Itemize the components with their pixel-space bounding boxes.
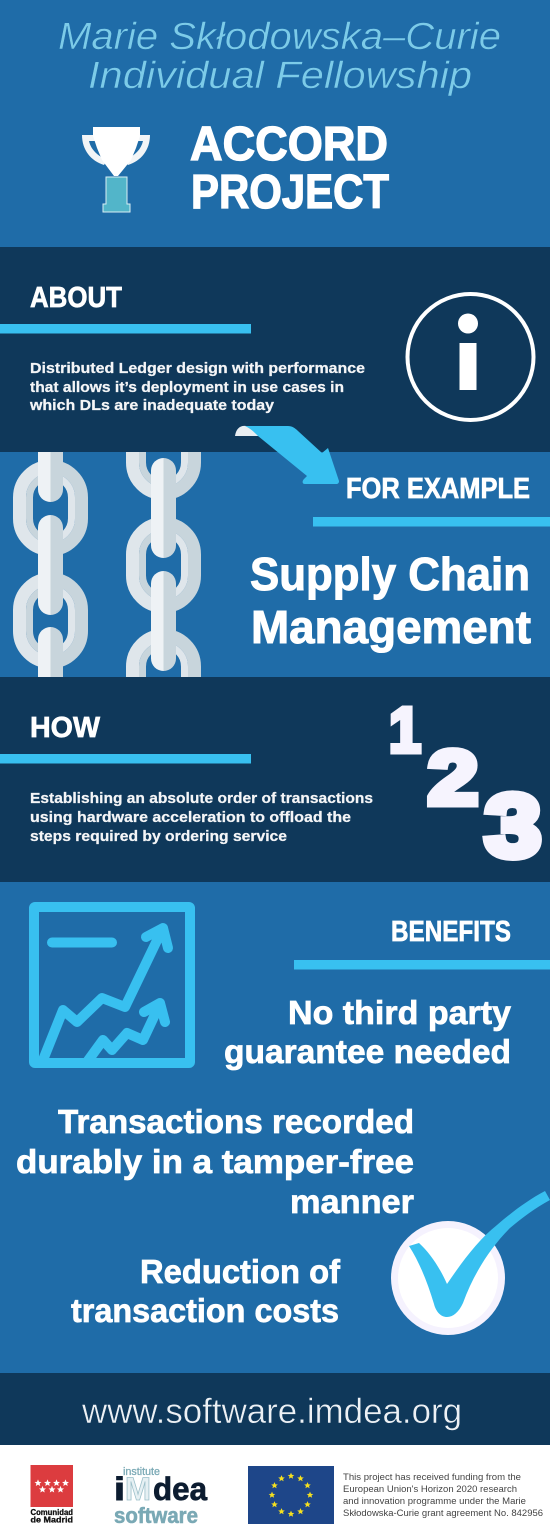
- benefit: tamper-free: durably in a tamper-free: [16, 1143, 414, 1180]
- funding statement: European Union's Horizon 2020 research: [343, 1484, 517, 1495]
- supply chain management: Supply Chain: [250, 548, 530, 600]
- funding statement: and innovation programme under the Marie: [343, 1496, 526, 1507]
- logo: imdea software: [114, 1466, 207, 1528]
- title: fellowship: Marie Skłodowska–Curie: [58, 16, 501, 58]
- section: for example: [250, 473, 550, 653]
- funding statement: Skłodowska-Curie grant agreement No. 842956: [343, 1508, 543, 1519]
- panel: about: [0, 247, 550, 452]
- logo: comunidad de madrid: [30, 1465, 73, 1524]
- numbers 1 2 3: 3: [485, 776, 541, 875]
- logo: imdea software: M: [125, 1471, 151, 1507]
- benefit: tamper-free: manner: [290, 1183, 414, 1220]
- for example heading: FOR EXAMPLE: [346, 473, 530, 505]
- about text: [29, 360, 365, 414]
- section: benefits: [16, 916, 550, 1329]
- how text: [30, 790, 373, 845]
- benefit: tamper-free: [16, 1103, 414, 1220]
- logo: imdea software: i: [114, 1471, 125, 1507]
- icon: information: [408, 294, 534, 420]
- benefit: no third party: No third party: [288, 994, 512, 1031]
- icon: check mark: [391, 1191, 550, 1335]
- benefit: tamper-free: Transactions recorded: [58, 1103, 414, 1140]
- footer: logos: [0, 1445, 550, 1539]
- how text: steps required by ordering service: [30, 828, 287, 845]
- icon: chains: [13, 452, 201, 677]
- logo: imdea software: institute: [123, 1466, 160, 1478]
- logo: imdea software: dea: [153, 1471, 207, 1507]
- funding statement: [343, 1472, 543, 1519]
- benefit: costs: [71, 1253, 341, 1329]
- numbers 1 2 3: 1: [389, 694, 421, 766]
- numbers 1 2 3: [389, 694, 541, 875]
- heading: accord project: [190, 118, 389, 219]
- supply chain management: [250, 548, 531, 653]
- heading: accord project: ACCORD: [190, 118, 388, 171]
- title: fellowship: Individual Fellowship: [88, 55, 472, 97]
- benefit: costs: Reduction of: [140, 1253, 341, 1290]
- footer: website band: [0, 1373, 550, 1445]
- about text: which DLs are inadequate today: [29, 397, 275, 414]
- how text: using hardware acceleration to offload the: [30, 809, 351, 826]
- logo: eu flag: [248, 1466, 334, 1524]
- how heading: HOW: [30, 712, 101, 744]
- title: fellowship: [58, 16, 501, 97]
- funding statement: This project has received funding from the: [343, 1472, 521, 1483]
- icon: trophy: [82, 127, 150, 212]
- supply chain management: Management: [251, 601, 531, 653]
- logo: imdea software: software: [114, 1503, 198, 1528]
- benefits heading: BENEFITS: [391, 916, 511, 948]
- how text: Establishing an absolute order of transactions: [30, 790, 373, 807]
- numbers 1 2 3: 2: [428, 736, 478, 821]
- logo: comunidad de madrid: Comunidad: [30, 1508, 73, 1517]
- logo: comunidad de madrid: de Madrid: [30, 1516, 73, 1524]
- panel: how: [0, 677, 550, 882]
- benefit: no third party: guarantee needed: [224, 1033, 511, 1070]
- icon: growth chart: [34, 907, 190, 1063]
- benefit: costs: transaction costs: [71, 1292, 339, 1329]
- about text: that allows it’s deployment in use cases in: [30, 379, 344, 396]
- arrow: about to example: [235, 426, 339, 484]
- benefit: no third party: [224, 994, 512, 1070]
- about text: Distributed Ledger design with performance: [30, 360, 365, 377]
- website url: www.software.imdea.org: [81, 1392, 462, 1431]
- heading: accord project: PROJECT: [191, 166, 389, 219]
- about heading: ABOUT: [30, 282, 122, 314]
